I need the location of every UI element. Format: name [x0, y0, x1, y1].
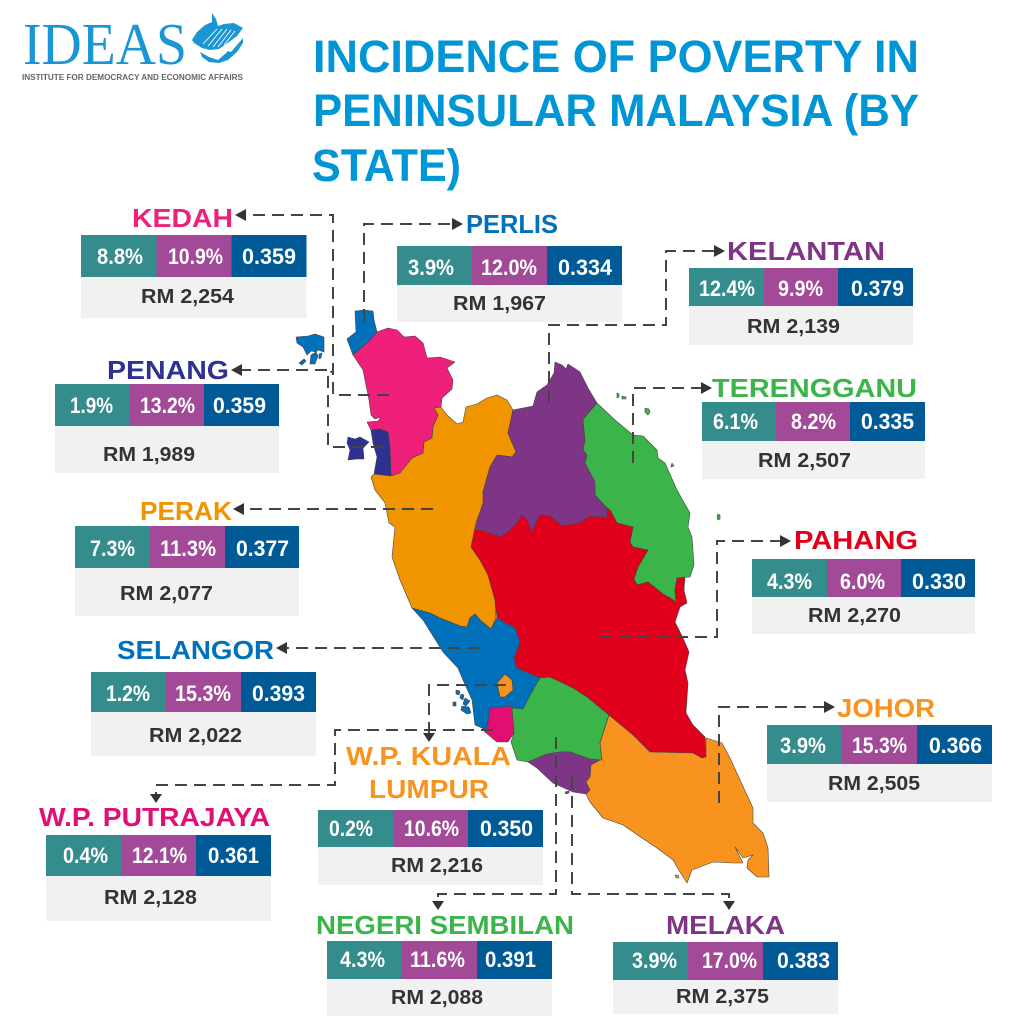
logo: IDEAS: IDEAS	[23, 11, 187, 77]
panel: Johor	[767, 693, 992, 802]
islands: Terengganu	[617, 393, 720, 520]
panel: Perak	[75, 496, 299, 616]
panel: Kelantan: RM 2,139	[747, 316, 840, 338]
panel: Terengganu: TERENGGANU	[712, 373, 917, 403]
panel: Kelantan: 9.9%	[778, 276, 823, 301]
panel: W.P. Kuala Lumpur: W.P. KUALA	[346, 741, 511, 771]
panel: Penang: 0.359	[213, 393, 266, 418]
state: Terengganu	[583, 403, 694, 602]
panel: Johor: 15.3%	[852, 733, 907, 758]
panel: W.P. Putrajaya: W.P. PUTRAJAYA	[39, 802, 270, 832]
panel: Perlis: RM 1,967	[453, 293, 546, 315]
panel: Kedah: KEDAH	[132, 203, 233, 233]
panel: Pahang: 6.0%	[840, 569, 885, 594]
panel: Terengganu: 0.335	[861, 409, 914, 434]
panel: W.P. Putrajaya: 0.4%	[63, 843, 108, 868]
connector: Terengganu	[633, 382, 712, 463]
panel: Negeri Sembilan	[316, 910, 574, 1016]
panel: Negeri Sembilan: 11.6%	[410, 947, 465, 972]
panel: Kelantan: 0.379	[851, 276, 904, 301]
state: Kedah	[353, 328, 455, 476]
title: STATE)	[312, 140, 461, 191]
panel: Johor: 0.366	[929, 733, 982, 758]
panel: Selangor: 0.393	[252, 681, 305, 706]
connector: W.P. Kuala Lumpur	[423, 685, 506, 742]
panel: Kelantan	[689, 236, 913, 345]
panel: W.P. Kuala Lumpur: RM 2,216	[391, 855, 483, 877]
state: Selangor	[412, 608, 540, 732]
connector: Kelantan	[549, 245, 725, 402]
connector: Kedah	[235, 209, 389, 395]
panel: Johor: JOHOR	[837, 693, 935, 723]
panel: Negeri Sembilan: 0.391	[485, 947, 536, 972]
panel: Selangor: 1.2%	[106, 681, 150, 706]
connector: Johor	[719, 701, 835, 803]
title: INCIDENCE OF POVERTY IN	[313, 31, 919, 82]
panel: Kedah: RM 2,254	[141, 286, 235, 308]
panel: Perlis: 3.9%	[408, 255, 454, 280]
panel: Melaka: 3.9%	[632, 948, 677, 973]
panel: Johor: RM 2,505	[828, 773, 920, 795]
panel: Terengganu: 8.2%	[791, 409, 836, 434]
connector: Penang	[231, 364, 383, 447]
title	[312, 31, 919, 191]
connector: Pahang	[600, 535, 791, 637]
island: Penang	[347, 437, 369, 460]
panel: Selangor	[91, 635, 316, 756]
panel: Pahang	[752, 525, 975, 634]
panel: Perak: 11.3%	[160, 536, 216, 561]
state: Penang mainland	[371, 429, 391, 476]
connector: Selangor	[276, 642, 479, 654]
panel: W.P. Kuala Lumpur: 10.6%	[404, 816, 459, 841]
panel: W.P. Putrajaya: 0.361	[208, 843, 259, 868]
panel: Pahang: PAHANG	[794, 525, 918, 555]
panel: Melaka: MELAKA	[666, 910, 785, 940]
panel: W.P. Putrajaya: RM 2,128	[104, 887, 197, 909]
panel: Kelantan: 12.4%	[699, 276, 755, 301]
panel: Perlis: 12.0%	[481, 255, 537, 280]
state: Pahang	[471, 508, 706, 758]
panel: Penang: 1.9%	[70, 393, 113, 418]
panel: Kedah: 0.359	[242, 244, 296, 269]
panel: W.P. Putrajaya: 12.1%	[132, 843, 187, 868]
state: Negeri Sembilan	[511, 677, 609, 762]
panel: Penang	[55, 355, 279, 473]
panel: Penang: RM 1,989	[103, 444, 195, 466]
panel: W.P. Kuala Lumpur	[318, 741, 543, 885]
panel: Pahang: 0.330	[912, 569, 966, 594]
panel: Melaka	[613, 910, 838, 1014]
title: PENINSULAR MALAYSIA (BY	[313, 85, 919, 136]
panel: Terengganu: RM 2,507	[758, 450, 851, 472]
panel: Melaka: 17.0%	[702, 948, 757, 973]
map: Peninsular Malaysia	[296, 310, 769, 883]
panel: Perlis: PERLIS	[466, 209, 558, 239]
panel: W.P. Kuala Lumpur: 0.350	[480, 816, 533, 841]
connector: Perak	[233, 503, 433, 515]
panel: Kedah: 8.8%	[97, 244, 143, 269]
panel: Melaka: 0.383	[777, 948, 830, 973]
state: Johor	[586, 715, 769, 883]
panel: Perak: 7.3%	[90, 536, 135, 561]
panel: Pahang: 4.3%	[767, 569, 812, 594]
panel: Terengganu	[702, 373, 925, 479]
panel: Selangor: SELANGOR	[117, 635, 274, 665]
islands: Selangor coast	[453, 690, 471, 714]
islands: Langkawi	[296, 334, 333, 373]
panel: Kedah: 10.9%	[168, 244, 223, 269]
panel: Melaka: RM 2,375	[676, 986, 769, 1008]
logo: IDEAS: INSTITUTE FOR DEMOCRACY AND ECONOMIC AFFAIRS	[22, 73, 244, 82]
state: Kelantan	[475, 362, 607, 537]
panel: Terengganu: 6.1%	[713, 409, 758, 434]
panel: Perak: 0.377	[236, 536, 289, 561]
panel: Negeri Sembilan: RM 2,088	[391, 987, 483, 1009]
panel: Negeri Sembilan: 4.3%	[340, 947, 385, 972]
panel: Selangor: 15.3%	[175, 681, 231, 706]
panel: Selangor: RM 2,022	[149, 725, 242, 747]
panel: W.P. Kuala Lumpur: LUMPUR	[369, 774, 489, 804]
panel: Perlis	[397, 209, 622, 322]
panel: Perlis: 0.334	[558, 255, 613, 280]
connector: Melaka	[572, 777, 735, 910]
panel: Pahang: RM 2,270	[808, 605, 901, 627]
panel: W.P. Putrajaya	[39, 802, 271, 921]
panel: Penang: 13.2%	[140, 393, 195, 418]
state: W.P. Putrajaya	[485, 706, 514, 742]
panel: W.P. Kuala Lumpur: 0.2%	[329, 816, 373, 841]
state: Melaka	[528, 752, 600, 794]
panel: Johor: 3.9%	[780, 733, 826, 758]
panel: Kedah	[81, 203, 306, 318]
state: Perak	[371, 395, 516, 629]
connector: Perlis	[364, 218, 463, 321]
state: Perlis	[347, 310, 377, 355]
state: W.P. Kuala Lumpur	[497, 674, 513, 697]
panel: Kelantan: KELANTAN	[727, 236, 885, 266]
panel: Perak: PERAK	[140, 496, 232, 526]
connector: W.P. Putrajaya	[150, 730, 493, 803]
panel: Negeri Sembilan: NEGERI SEMBILAN	[316, 910, 574, 940]
panel: Perak: RM 2,077	[120, 583, 213, 605]
connector: Negeri Sembilan	[432, 737, 556, 910]
panel: Penang: PENANG	[107, 355, 229, 385]
